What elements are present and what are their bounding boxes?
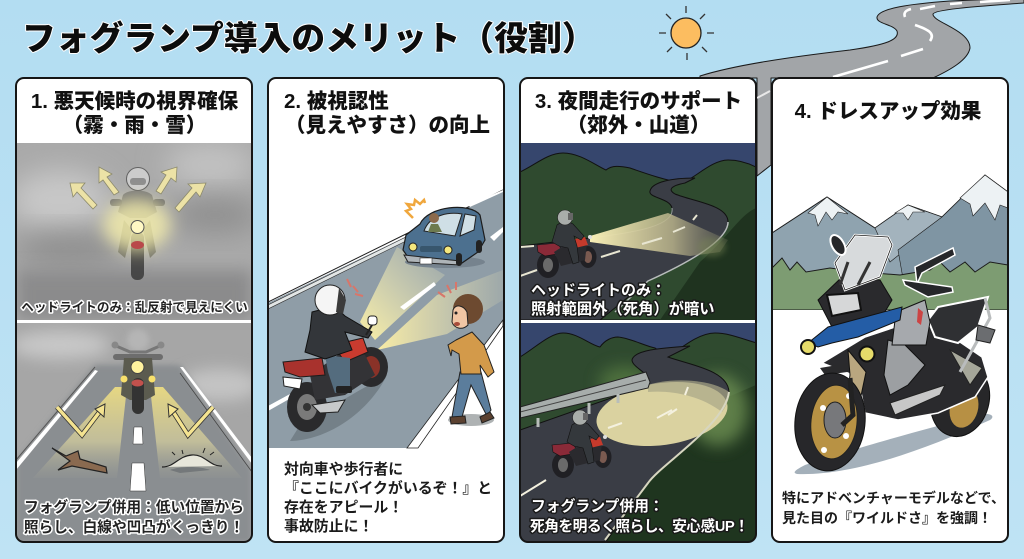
caption: fog lamps: 死角を明るく照らし、安心感UP！ — [530, 517, 749, 535]
arrows: reflected light — [57, 407, 213, 435]
panel 1: bad weather visibility — [10, 78, 260, 543]
illustration: headlight only in fog — [10, 143, 260, 320]
motorcycle with fog lamps — [112, 329, 164, 414]
illuminated road area — [596, 382, 728, 446]
icon: car — [403, 207, 485, 268]
text block 2: 存在をアピール！ — [284, 498, 403, 516]
arrows: scattered light — [70, 167, 206, 212]
mirrors — [827, 232, 849, 258]
heading 3 — [535, 90, 742, 137]
caption: headlight only — [531, 282, 715, 318]
emphasis marks by rider — [347, 279, 363, 296]
text block 4: 見た目の『ワイルドさ』を強調！ — [782, 510, 992, 526]
heading 2: 2. 被視認性 — [284, 90, 389, 113]
illustration: mountains — [772, 175, 1008, 320]
handguard — [903, 280, 953, 297]
panel 4: dress-up — [772, 78, 1008, 542]
heading 2 — [284, 90, 490, 137]
headlight beam — [590, 213, 728, 256]
illustration: fog lamps combined — [10, 323, 260, 543]
text block 2: 『ここにバイクがいるぞ！』と — [284, 479, 492, 497]
heading 1: （霧・雨・雪） — [63, 114, 206, 137]
illustration: adventure motorcycle — [790, 232, 998, 474]
text block 2: 対向車や歩行者に — [284, 460, 403, 478]
windscreen — [835, 235, 892, 290]
text block 2: 事故防止に！ — [284, 517, 373, 535]
text block 2 — [284, 460, 492, 535]
text block 4 — [782, 490, 1005, 526]
front wheel — [790, 370, 870, 474]
panel 3: night riding — [520, 78, 757, 543]
heading 1 — [31, 89, 239, 137]
heading 2: （見えやすさ）の向上 — [285, 114, 490, 137]
caption: fog lamps: フォグランプ併用： — [531, 497, 664, 515]
icon: motorcycle with rider — [283, 285, 388, 441]
heading 3: （郊外・山道） — [567, 113, 710, 137]
guardrail — [520, 372, 650, 427]
winding road — [700, 0, 1024, 176]
icon: motorcycle rider — [552, 410, 612, 478]
icon: pedestrian — [448, 294, 494, 426]
title: フォグランプ導入のメリット（役割） — [22, 19, 596, 58]
headlight surround — [818, 277, 892, 327]
blue fairing — [808, 307, 902, 347]
seat and rack — [928, 297, 988, 343]
caption: fog lamps: フォグランプ併用：低い位置から — [24, 498, 244, 516]
heading 1: 1. 悪天候時の視界確保 — [31, 89, 239, 113]
fog lamp beams — [40, 387, 126, 472]
icon: motorcycle rider — [537, 210, 596, 278]
illustration: night road, headlight only — [520, 143, 756, 320]
engine and frame — [822, 325, 988, 420]
caption: headlight only: ヘッドライトのみ：乱反射で見えにくい — [21, 300, 248, 314]
rear wheel — [931, 380, 990, 438]
caption: fog lamps — [530, 497, 749, 535]
headlight beams — [360, 247, 445, 340]
road centre dashes — [130, 427, 146, 491]
icon: alert spark — [406, 200, 425, 218]
caption: headlight only: ヘッドライトのみ： — [531, 282, 666, 299]
icon: sun — [659, 6, 714, 60]
caption: fog lamps — [24, 498, 244, 536]
fog lamps — [801, 340, 815, 354]
heading 3: 3. 夜間走行のサポート — [535, 90, 742, 113]
icon: fallen branch — [52, 448, 107, 473]
illustration: road with car and pedestrian — [268, 190, 503, 448]
motorcycle front view — [110, 168, 165, 280]
caption: fog lamps: 照らし、白線や凹凸がくっきり！ — [24, 518, 244, 536]
caption: headlight only: 照射範囲外（死角）が暗い — [531, 300, 715, 318]
silver tank — [892, 300, 930, 345]
front fender and fork — [820, 362, 862, 375]
panel 2: being seen — [268, 78, 504, 542]
icon: road bump — [162, 448, 222, 473]
illustration: night road, fog lamps — [520, 323, 757, 543]
heading 4: 4. ドレスアップ効果 — [795, 100, 982, 123]
text block 4: 特にアドベンチャーモデルなどで、 — [782, 490, 1005, 506]
emphasis marks by pedestrian — [438, 282, 456, 297]
